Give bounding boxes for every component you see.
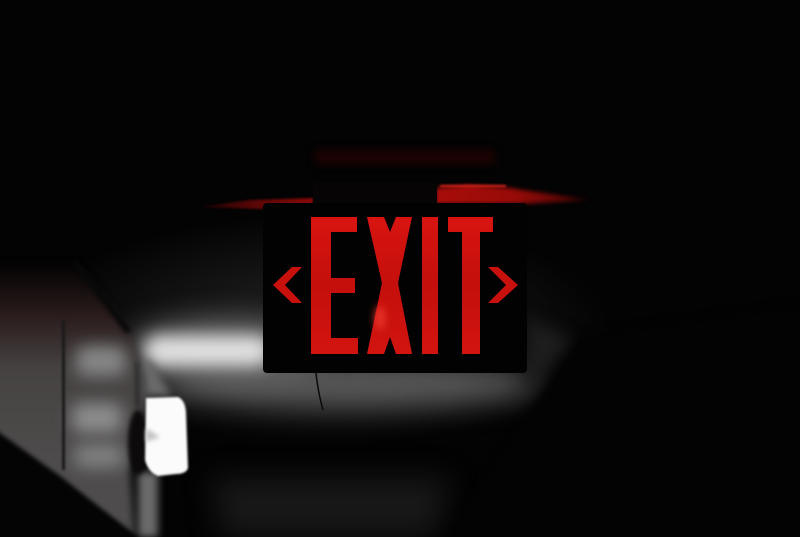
letter X [367,217,412,354]
reflection in X [375,306,385,330]
letter I [422,217,438,354]
bright strip under fixture [138,472,158,537]
wall light fixture [128,397,188,476]
upper red reflections [200,150,590,209]
hanging cable [316,373,323,410]
left wall [0,260,172,537]
left chevron arrow [273,267,302,303]
bottom-left dark floor wedge [0,426,137,537]
exit sign panel [263,203,527,373]
right corridor shadow [445,300,800,537]
light band on ceiling [125,318,572,408]
letter T [448,217,493,354]
right chevron arrow [488,267,518,303]
ceiling glow: corridor [30,215,610,537]
mounting bracket [313,182,437,206]
letter E [311,217,358,354]
